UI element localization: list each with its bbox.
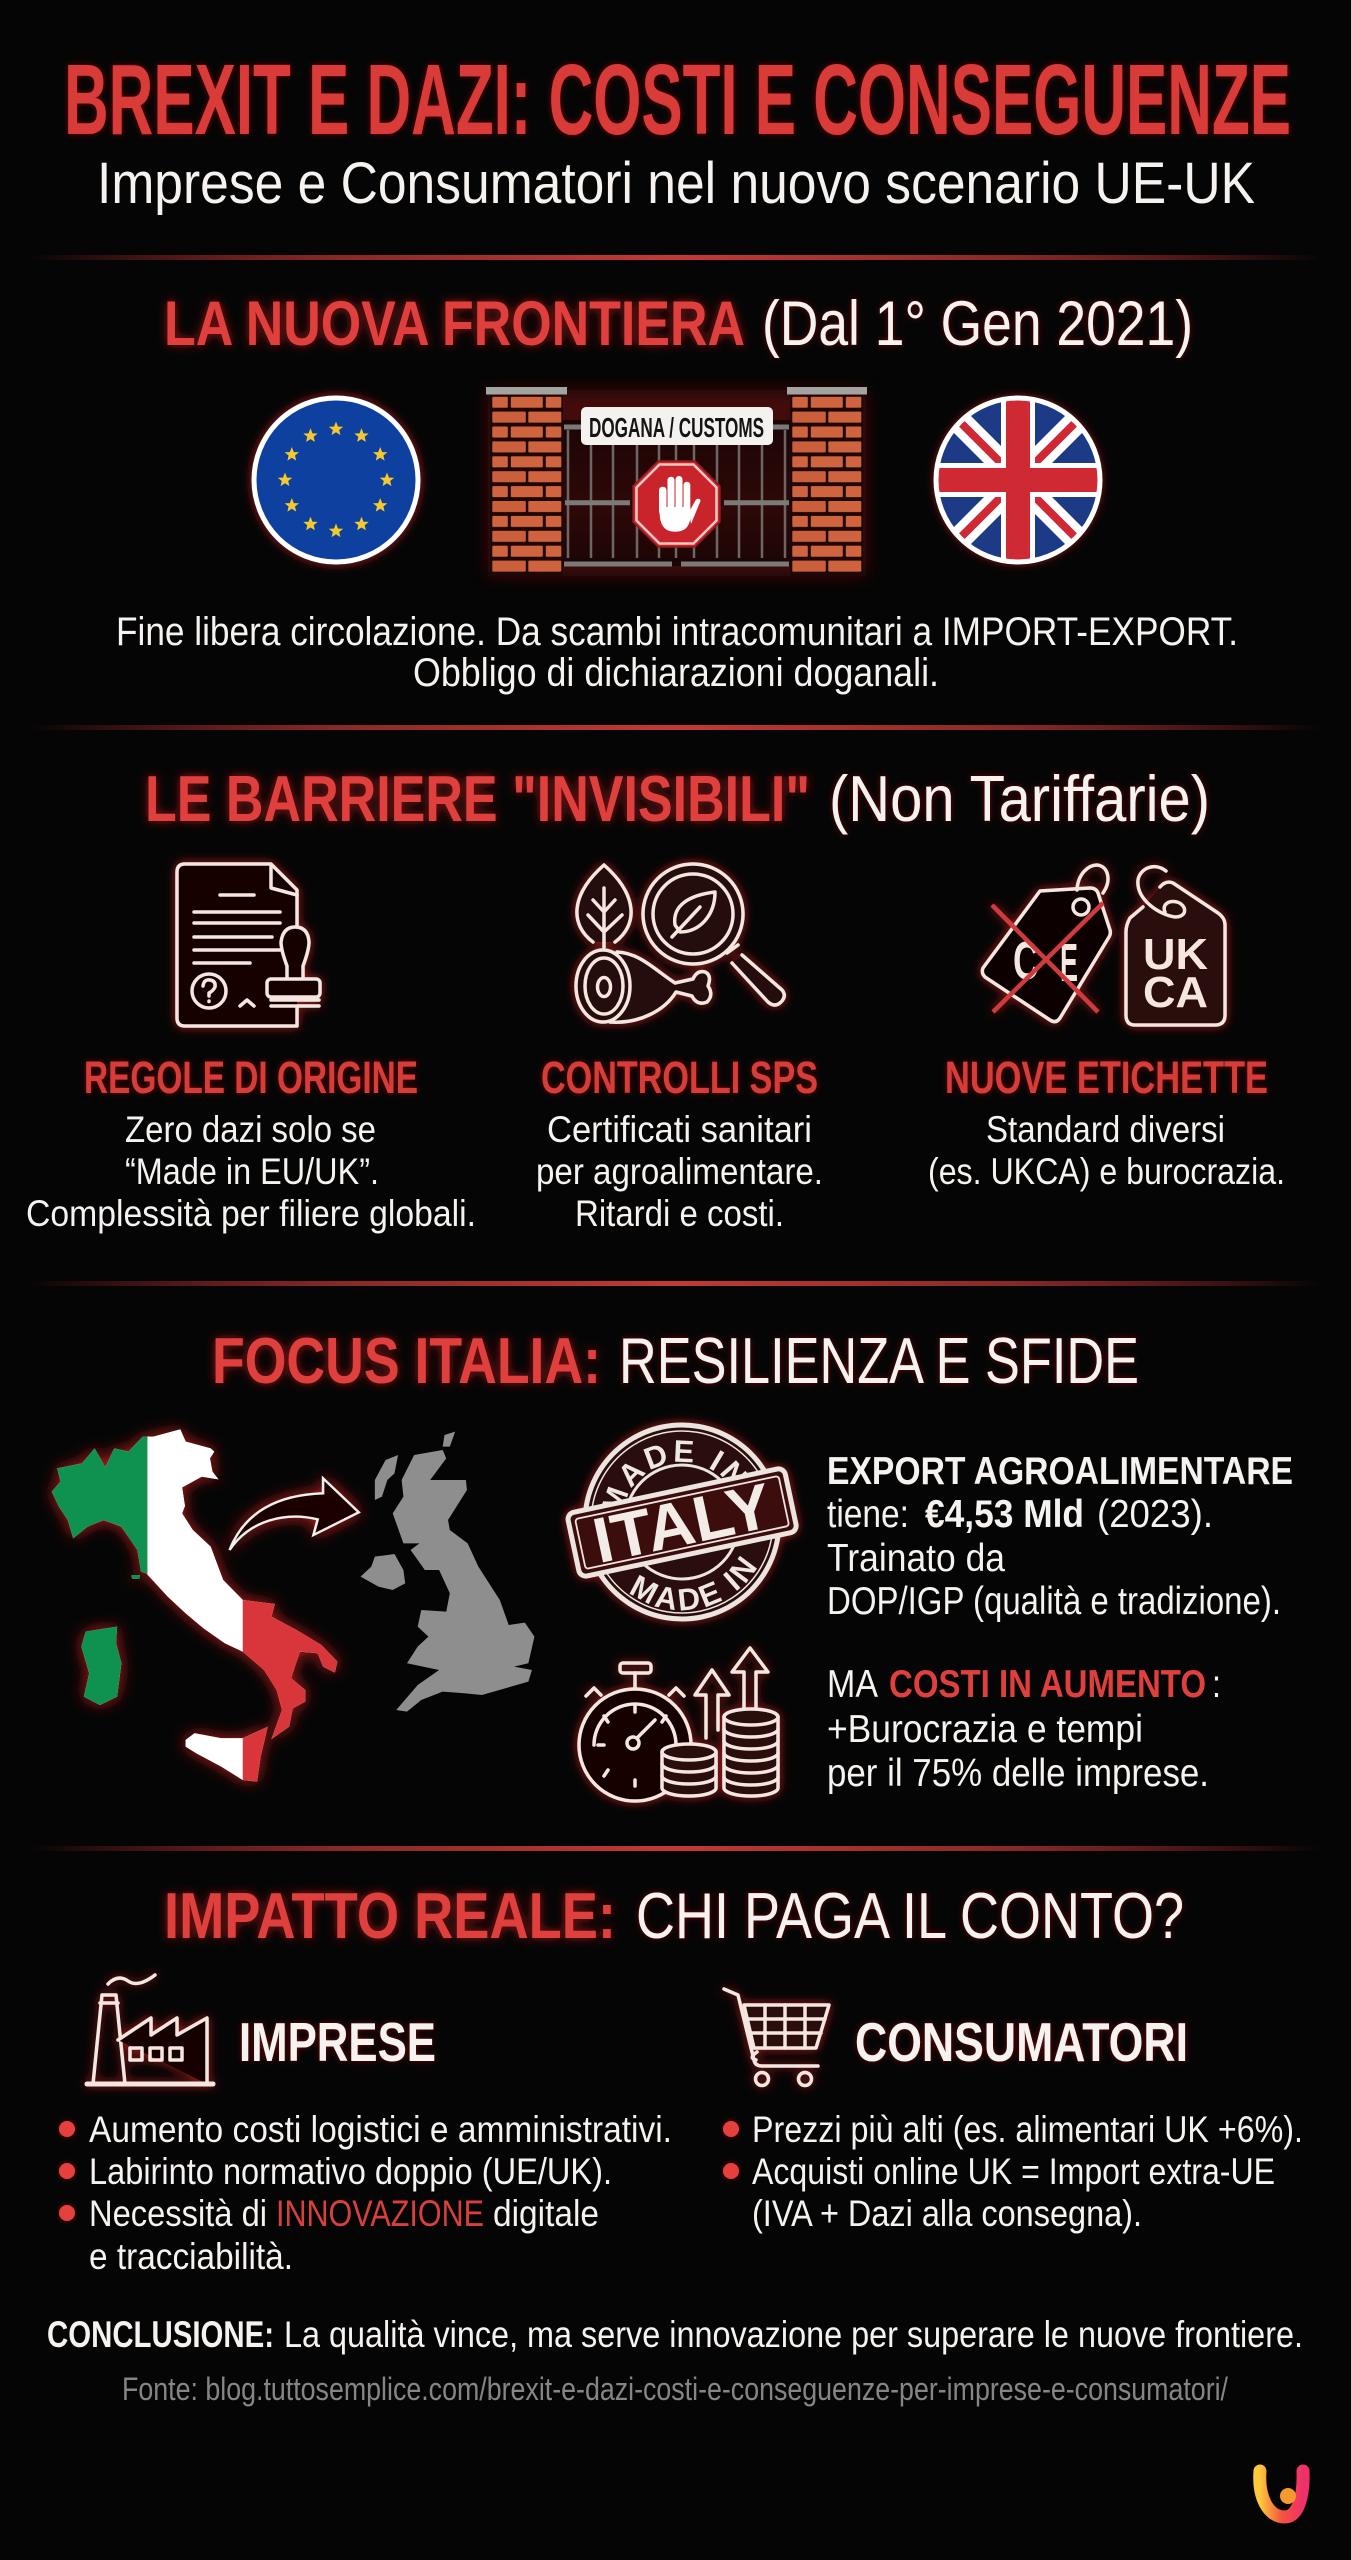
arrow: Italy to UK bbox=[230, 1478, 359, 1550]
heading: impatto reale: IMPATTO REALE: bbox=[164, 1879, 616, 1952]
icon: EU flag bbox=[254, 398, 418, 562]
list: impatti sulle imprese: e tracciabilità. bbox=[89, 2236, 293, 2277]
icon: customs gate bbox=[486, 387, 867, 576]
text: export agroalimentare bbox=[827, 1450, 1293, 1623]
list: impatti sulle imprese: digitale bbox=[493, 2193, 599, 2234]
text: costi in aumento: MA bbox=[827, 1663, 878, 1706]
icon: stopwatch, coins and rising arrows bbox=[579, 1648, 778, 1801]
text: export agroalimentare: Trainato da bbox=[827, 1537, 1005, 1580]
text: costi in aumento: COSTI IN AUMENTO bbox=[889, 1663, 1206, 1706]
icon: plant, meat and magnifier bbox=[576, 864, 784, 1022]
list: impatti sulle imprese bbox=[59, 2109, 672, 2277]
icon: crossed CE tag and UKCA tag: E bbox=[1060, 933, 1078, 993]
column: controlli sps: Certificati sanitari bbox=[547, 1109, 812, 1150]
heading: impatto reale bbox=[164, 1879, 1184, 1952]
heading: consumatori: CONSUMATORI bbox=[855, 2011, 1188, 2073]
icon: crossed CE tag and UKCA tag: C bbox=[1013, 931, 1039, 991]
conclusion: CONCLUSIONE: bbox=[47, 2314, 274, 2355]
heading: impatto reale: CHI PAGA IL CONTO? bbox=[636, 1879, 1184, 1952]
icon: crossed CE tag and UKCA tag bbox=[982, 865, 1225, 1025]
text: export agroalimentare: EXPORT AGROALIMENTARE bbox=[827, 1450, 1293, 1493]
list: impatti sui consumatori: Acquisti online UK = Import extra-UE bbox=[752, 2151, 1275, 2192]
column: controlli sps: per agroalimentare. bbox=[536, 1151, 823, 1192]
text: nuova frontiera description: Obbligo di dichiarazioni doganali. bbox=[413, 651, 939, 695]
heading: focus italia: RESILIENZA E SFIDE bbox=[619, 1324, 1139, 1397]
icon: document and stamp bbox=[177, 864, 320, 1026]
text: export agroalimentare: (2023). bbox=[1097, 1493, 1213, 1536]
icon: customs gate: DOGANA / CUSTOMS bbox=[589, 412, 764, 443]
list: impatti sulle imprese: INNOVAZIONE bbox=[276, 2193, 484, 2234]
icon: crossed CE tag and UKCA tag: CA bbox=[1143, 968, 1208, 1017]
heading: la nuova frontiera: (Dal 1° Gen 2021) bbox=[762, 289, 1193, 359]
column: nuove etichette: (es. UKCA) e burocrazia. bbox=[928, 1151, 1285, 1192]
icon: logo bbox=[1260, 2471, 1303, 2517]
text: export agroalimentare: DOP/IGP (qualità e tradizione). bbox=[827, 1580, 1281, 1623]
heading: imprese: IMPRESE bbox=[239, 2011, 436, 2073]
text: costi in aumento: : bbox=[1212, 1663, 1221, 1706]
text: costi in aumento: per il 75% delle imprese. bbox=[827, 1752, 1209, 1795]
column: controlli sps: CONTROLLI SPS bbox=[541, 1052, 818, 1103]
icon: made in Italy stamp: MADE IN bbox=[630, 1556, 757, 1611]
list: impatti sui consumatori: (IVA + Dazi alla consegna). bbox=[752, 2193, 1142, 2234]
text: costi in aumento: +Burocrazia e tempi bbox=[827, 1708, 1143, 1751]
list: impatti sui consumatori bbox=[723, 2109, 1303, 2234]
icon: made in Italy stamp: MADE IN bbox=[602, 1440, 748, 1504]
heading: focus italia bbox=[212, 1324, 1139, 1397]
heading: le barriere invisibili: (Non Tariffarie) bbox=[829, 762, 1210, 835]
text: export agroalimentare: tiene: bbox=[827, 1493, 909, 1536]
heading: la nuova frontiera bbox=[164, 289, 1193, 359]
list: impatti sulle imprese: Labirinto normativo doppio (UE/UK). bbox=[89, 2151, 612, 2192]
text: nuova frontiera description bbox=[116, 610, 1238, 695]
column: regole di origine: Zero dazi solo se bbox=[125, 1109, 376, 1150]
column: nuove etichette bbox=[928, 1052, 1285, 1192]
list: impatti sulle imprese: Necessità di bbox=[89, 2193, 267, 2234]
column: controlli sps: Ritardi e costi. bbox=[575, 1193, 784, 1234]
column: controlli sps bbox=[536, 1052, 823, 1234]
icon: crossed CE tag and UKCA tag: UK bbox=[1143, 930, 1208, 979]
column: nuove etichette: Standard diversi bbox=[986, 1109, 1225, 1150]
icon: made in Italy stamp: ITALY bbox=[587, 1469, 778, 1577]
heading: focus italia: FOCUS ITALIA: bbox=[212, 1324, 601, 1397]
heading: le barriere invisibili: LE BARRIERE "INVISIBILI" bbox=[145, 762, 810, 835]
icon: factory bbox=[87, 1975, 213, 2084]
column: regole di origine bbox=[26, 1052, 476, 1234]
icon: shopping cart bbox=[724, 1989, 829, 2086]
column: regole di origine: Complessità per filiere globali. bbox=[26, 1193, 476, 1234]
text: export agroalimentare: €4,53 Mld bbox=[925, 1493, 1084, 1536]
text: costi in aumento bbox=[827, 1663, 1221, 1795]
map: Italy in tricolour bbox=[52, 1429, 337, 1782]
icon: made in Italy stamp bbox=[558, 1415, 806, 1629]
heading: la nuova frontiera: LA NUOVA FRONTIERA bbox=[164, 289, 745, 359]
icon: UK flag bbox=[928, 390, 1108, 570]
map: United Kingdom bbox=[361, 1432, 534, 1712]
column: regole di origine: “Made in EU/UK”. bbox=[125, 1151, 379, 1192]
list: impatti sulle imprese: Aumento costi logistici e amministrativi. bbox=[89, 2109, 672, 2150]
column: regole di origine: REGOLE DI ORIGINE bbox=[84, 1052, 418, 1103]
